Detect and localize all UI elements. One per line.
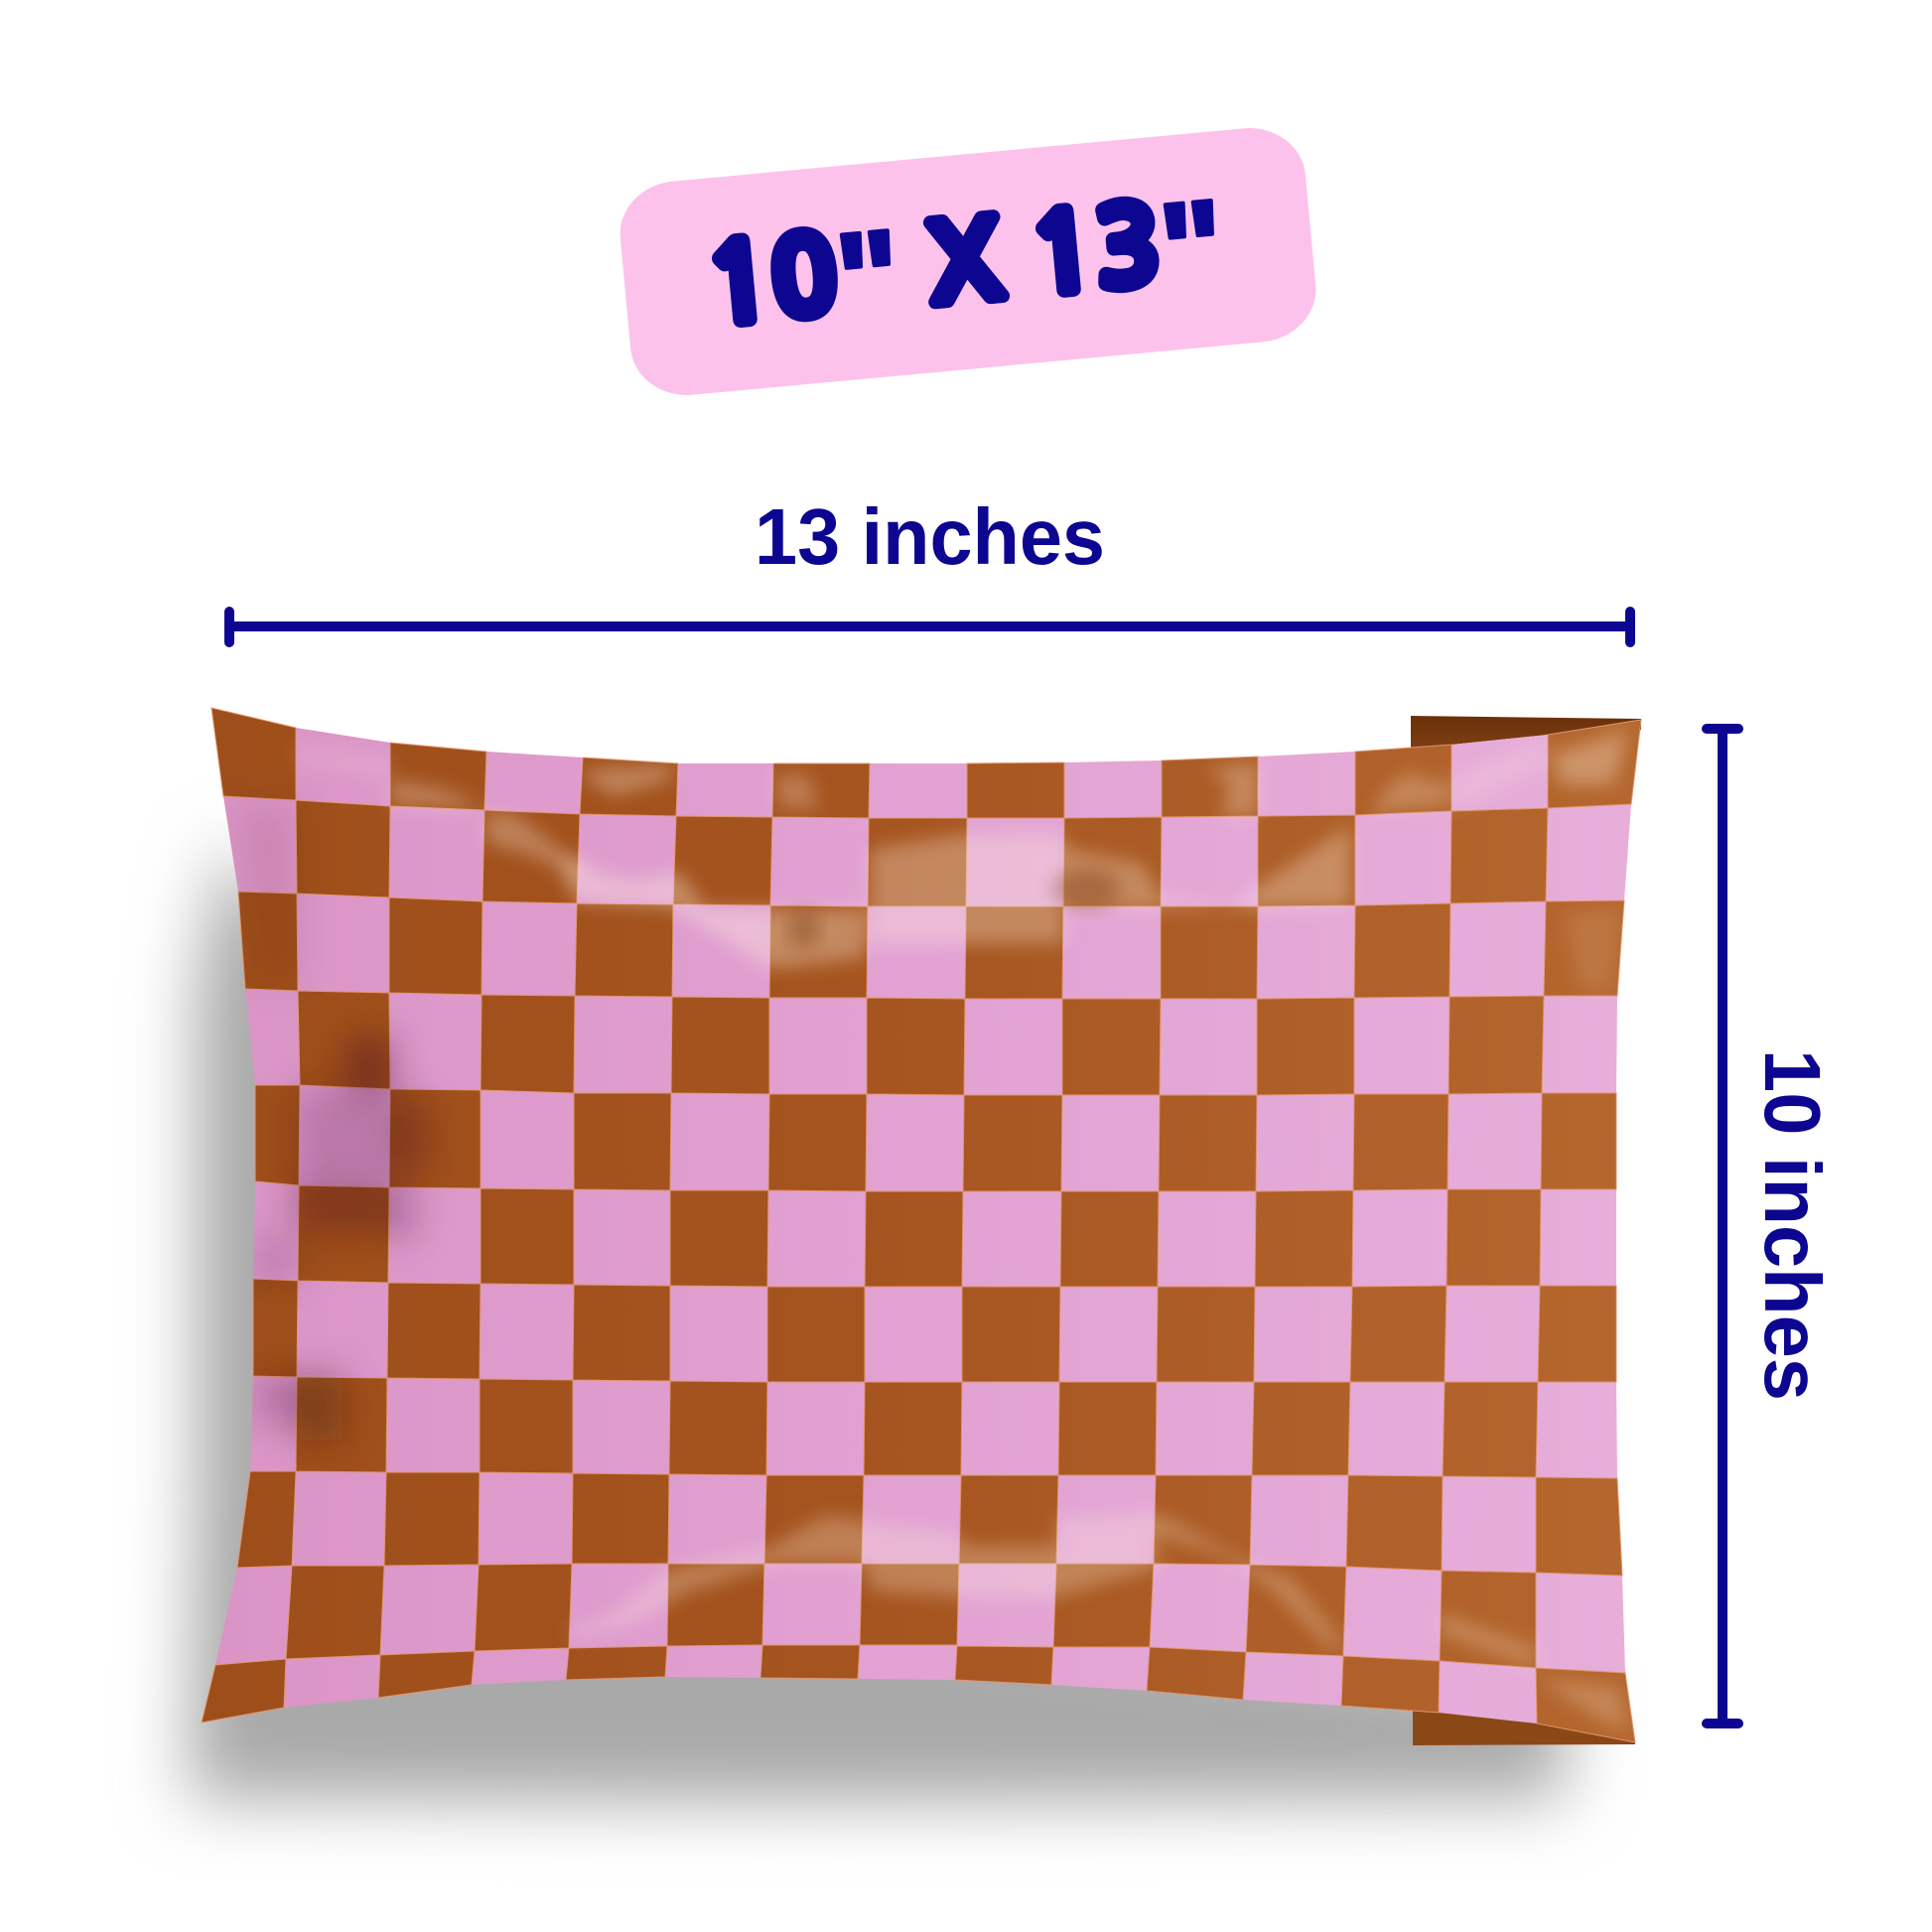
small dark pocket inside gloss: [1053, 869, 1121, 908]
badge text: X 13: [895, 193, 1166, 323]
left side creases (dark): [238, 804, 427, 1440]
rear flap top: [1411, 716, 1641, 750]
gloss highlights: [296, 730, 1628, 1732]
bag pink base: [202, 708, 1641, 1742]
height label: 10 inches: [1748, 1049, 1837, 1401]
infographic canvas: [149, 128, 1823, 1844]
rear flap bottom: [1413, 1703, 1635, 1745]
width label: 13 inches: [755, 492, 1105, 581]
badge text: 10: [702, 222, 842, 341]
height dimension line: [1702, 724, 1743, 1728]
drop shadow beneath the mailer: [189, 844, 1569, 1802]
dark pocket in lower fold: [789, 909, 819, 949]
badge background pill: [616, 123, 1320, 400]
bag brown checker squares: [202, 708, 1641, 1742]
badge text: ": [830, 201, 907, 356]
bag shading and plastic highlights: [238, 730, 1628, 1732]
badge text: ": [1154, 171, 1231, 326]
width dimension line: [224, 607, 1635, 647]
badge: size title: [616, 123, 1320, 400]
checkered mailer bag: [202, 708, 1641, 1742]
